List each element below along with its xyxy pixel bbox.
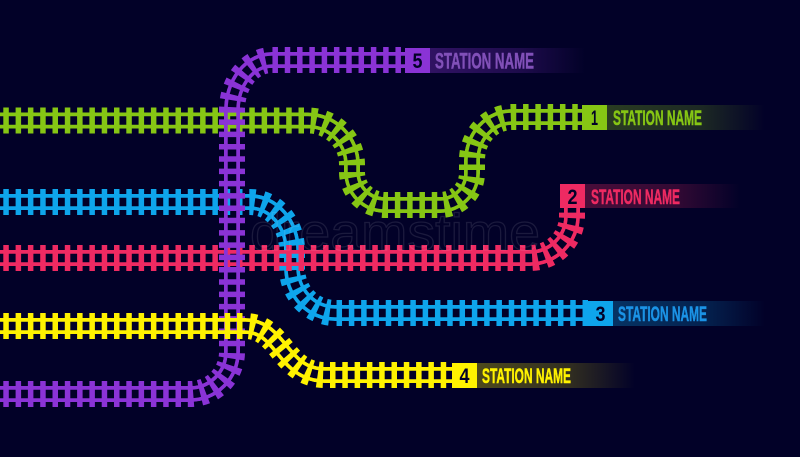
line 4: yellow track and station (0, 326, 635, 388)
line 5: purple track and station (0, 48, 585, 394)
station 3 label: 3 (596, 303, 606, 326)
line 1: green track and station (0, 105, 765, 205)
station 5 label: STATION NAME (435, 48, 534, 74)
station 1 label: STATION NAME (613, 107, 702, 130)
purple railway track (0, 60, 405, 394)
station 4 label: 4 (460, 365, 470, 388)
station 4 label: STATION NAME (482, 365, 571, 388)
blue railway track (0, 202, 588, 313)
station 3 label: STATION NAME (618, 303, 707, 326)
station 2 label: 2 (568, 186, 578, 209)
station 2 label: STATION NAME (591, 186, 680, 209)
watermark: dreamstime (250, 204, 540, 262)
line 2: red track and station (0, 184, 740, 258)
green railway track (0, 117, 582, 205)
station 1 label: 1 (591, 107, 598, 130)
station 5 label: 5 (412, 50, 423, 73)
line 3: blue track and station (0, 202, 765, 326)
yellow railway track (0, 326, 452, 375)
red railway track (0, 208, 572, 258)
